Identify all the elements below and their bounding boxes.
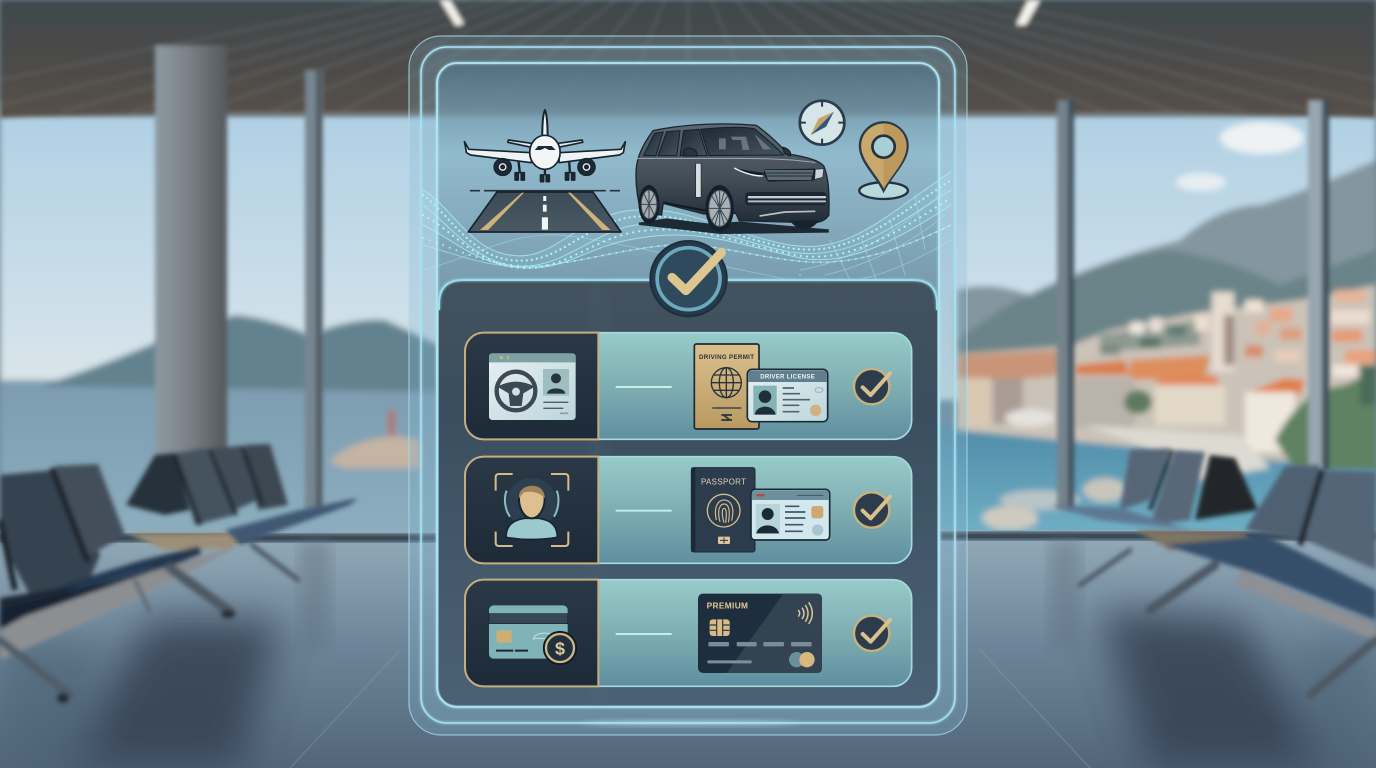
car windows bbox=[644, 127, 783, 156]
icon: premium card bbox=[698, 594, 822, 673]
background ceiling bbox=[0, 0, 1376, 118]
icon: check badge bbox=[854, 369, 890, 404]
background seating right bbox=[1050, 448, 1376, 695]
icon: face scan bbox=[496, 474, 568, 546]
icon: card with dollar coin: $ bbox=[555, 638, 565, 658]
row 1 background bbox=[465, 333, 912, 439]
row 3: payment card bbox=[465, 580, 912, 686]
icon: passport bbox=[691, 468, 755, 552]
icon: ID card bbox=[751, 489, 830, 540]
icon: driver license card bbox=[747, 369, 828, 422]
icon: licence with steering wheel bbox=[489, 353, 576, 420]
panel: requirements bbox=[439, 280, 937, 705]
icon: airplane bbox=[464, 110, 625, 182]
row 1: driving licence bbox=[465, 333, 912, 439]
connector line bbox=[616, 386, 672, 388]
data wave mesh bbox=[423, 172, 951, 300]
glass card frames bbox=[409, 36, 967, 735]
icon: driving permit booklet bbox=[694, 344, 759, 429]
icon: location pin bbox=[859, 122, 908, 199]
background columns bbox=[155, 45, 1329, 510]
illustration: airplane on runway bbox=[464, 110, 625, 232]
row 2: identity bbox=[465, 457, 912, 563]
icon: passport: PASSPORT bbox=[701, 478, 746, 487]
icon: runway bbox=[468, 191, 621, 232]
icon: check badge bbox=[854, 492, 890, 528]
icon: card with dollar coin bbox=[489, 605, 576, 664]
illustration: SUV bbox=[636, 124, 829, 234]
icon: check badge bbox=[854, 616, 890, 651]
row 3 background bbox=[465, 580, 912, 686]
main check badge bbox=[650, 241, 727, 316]
icon: driver license card: DRIVER LICENSE bbox=[760, 375, 815, 381]
icon: compass bbox=[799, 100, 845, 145]
icon: driving permit booklet: DRIVING PERMIT bbox=[699, 354, 754, 361]
car body bbox=[636, 124, 829, 223]
connector line bbox=[616, 510, 672, 512]
car wheels bbox=[639, 185, 819, 232]
icon: premium card: PREMIUM bbox=[707, 601, 748, 611]
car details bbox=[637, 134, 827, 216]
bottom glow on frame bbox=[580, 719, 800, 727]
background floor bbox=[0, 530, 1376, 768]
connector line bbox=[616, 633, 672, 635]
row 2 background bbox=[465, 457, 912, 563]
background seating left bbox=[0, 444, 358, 703]
background sky and view bbox=[0, 100, 1376, 550]
